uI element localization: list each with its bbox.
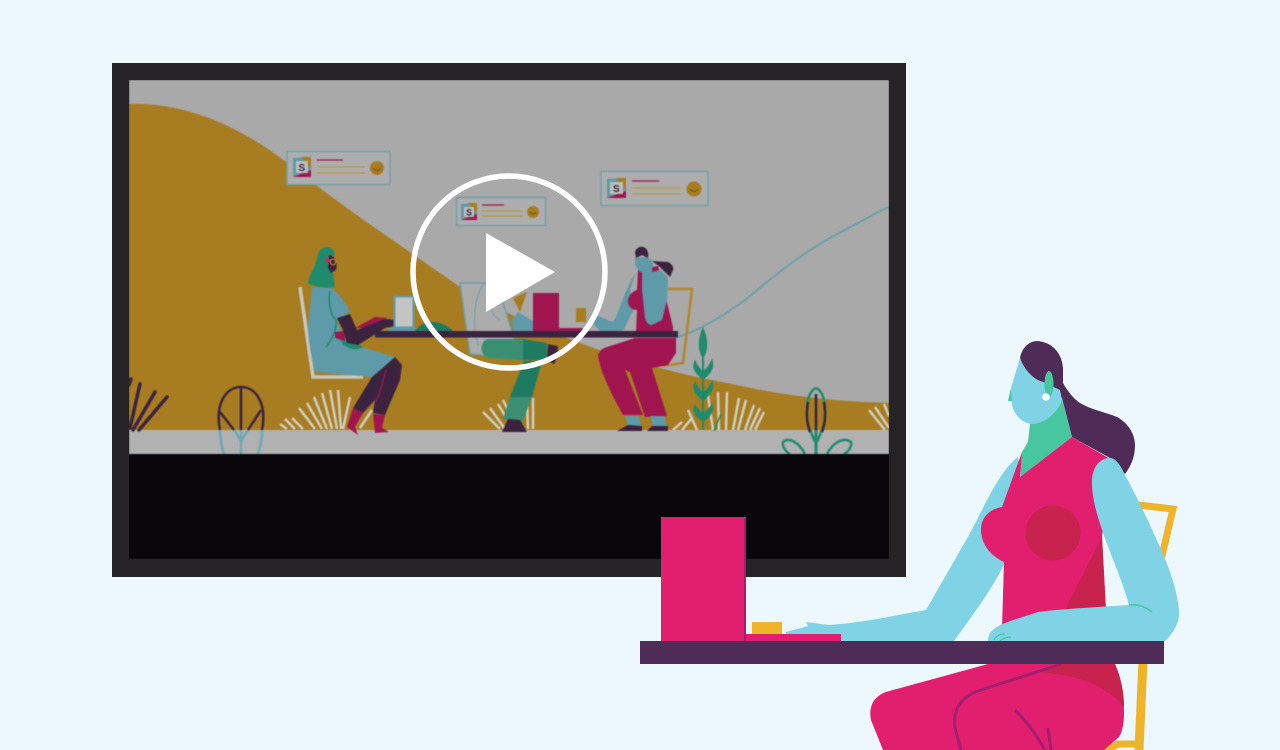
foot bbox=[547, 344, 558, 364]
notification card left: S bbox=[298, 163, 306, 174]
neck bbox=[1020, 398, 1072, 477]
notification card left bbox=[287, 152, 390, 184]
foreground woman bbox=[640, 341, 1179, 750]
socks bbox=[625, 416, 667, 426]
leaf plant left bbox=[219, 387, 263, 454]
ear bbox=[1044, 371, 1054, 397]
video sky bbox=[129, 80, 889, 454]
grass right bbox=[673, 392, 764, 430]
leaf plant right bbox=[783, 388, 851, 454]
near arm bbox=[642, 270, 668, 325]
left laptop bbox=[388, 296, 415, 331]
glasses bbox=[325, 258, 336, 265]
arm crease bbox=[1129, 605, 1152, 612]
teal wavy line bbox=[678, 207, 889, 337]
right person chair bbox=[662, 289, 692, 366]
dress bbox=[308, 287, 395, 377]
notification card right bbox=[601, 172, 708, 206]
head hair bbox=[635, 247, 648, 258]
crimson laptop bbox=[533, 293, 583, 331]
left twigs bbox=[129, 379, 167, 430]
torso bbox=[512, 312, 533, 331]
dress shadow bbox=[1065, 537, 1106, 610]
screen frame bbox=[112, 63, 906, 577]
face bbox=[328, 255, 337, 273]
far arm bbox=[784, 457, 1022, 641]
cup bbox=[576, 308, 586, 322]
notification card centre bbox=[456, 198, 546, 226]
yellow block bbox=[752, 622, 782, 634]
chair bbox=[1104, 505, 1173, 750]
pants bbox=[598, 338, 676, 417]
green plant bbox=[694, 328, 721, 431]
table bbox=[640, 641, 1164, 664]
thigh bbox=[481, 339, 523, 360]
desk objects bbox=[415, 322, 453, 331]
left person chair bbox=[300, 287, 363, 377]
play button bbox=[413, 176, 605, 368]
laptop bbox=[661, 517, 841, 641]
shoe bbox=[502, 419, 527, 432]
right person bbox=[590, 247, 676, 431]
grass far right bbox=[869, 404, 889, 430]
video scene bbox=[129, 80, 889, 559]
ponytail bbox=[652, 261, 673, 277]
leg bbox=[353, 357, 402, 415]
boots bbox=[347, 408, 389, 435]
grass centre bbox=[483, 398, 533, 429]
lower dress bbox=[870, 664, 1124, 750]
dress top bbox=[981, 437, 1112, 628]
face bbox=[1011, 358, 1062, 424]
arm bbox=[337, 314, 397, 345]
near arm bbox=[988, 458, 1179, 641]
jumper bbox=[335, 317, 387, 341]
lower leg bbox=[510, 361, 542, 397]
dress dark circle bbox=[1026, 506, 1080, 560]
video table bbox=[375, 331, 678, 338]
hair bbox=[308, 247, 335, 288]
sketch lines bbox=[475, 284, 500, 345]
lower dress shadow bbox=[1033, 664, 1124, 707]
notification card centre: S bbox=[466, 208, 472, 218]
dress bbox=[628, 266, 673, 332]
dress shadow bbox=[340, 340, 363, 349]
video screen bbox=[112, 63, 906, 577]
dress fold lines bbox=[955, 664, 1061, 750]
centre person chair bbox=[460, 283, 520, 358]
shoes bbox=[617, 425, 668, 431]
earring bbox=[1042, 393, 1050, 401]
dress seam bbox=[326, 291, 336, 347]
left person bbox=[308, 247, 402, 435]
finger lines bbox=[994, 634, 1011, 641]
black letterbox bbox=[129, 454, 889, 559]
far arm bbox=[590, 272, 636, 331]
notification card right: S bbox=[613, 184, 620, 195]
ground bbox=[129, 430, 889, 454]
centre person bbox=[475, 284, 558, 432]
neck bbox=[513, 292, 527, 312]
hair bbox=[1020, 341, 1135, 474]
grass left bbox=[280, 390, 372, 429]
mustard hill bbox=[129, 104, 889, 430]
nose bbox=[1008, 388, 1012, 401]
head bbox=[635, 257, 653, 272]
